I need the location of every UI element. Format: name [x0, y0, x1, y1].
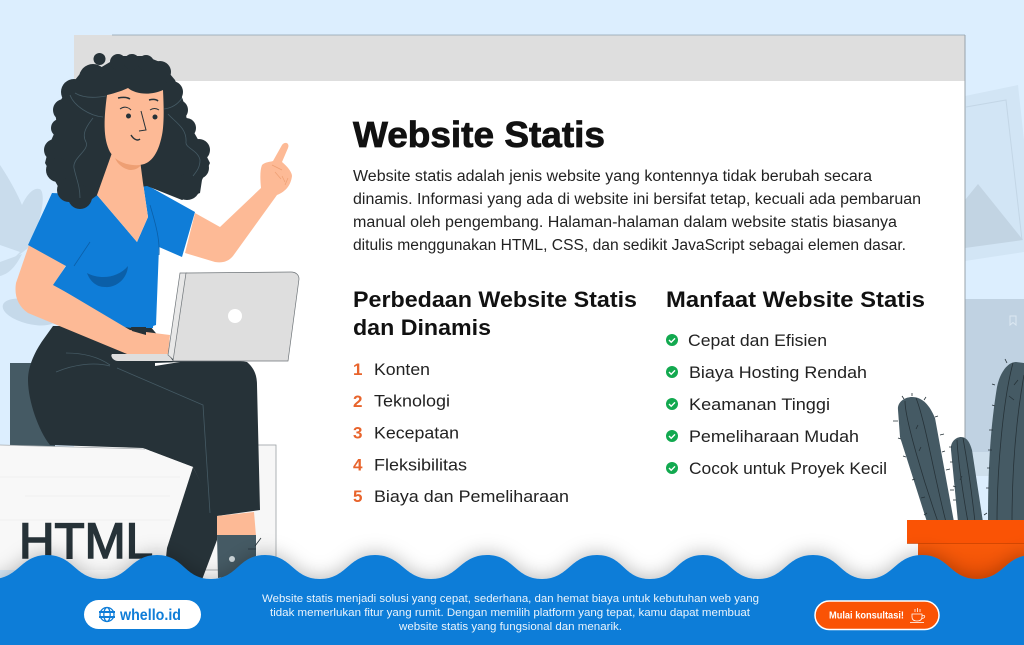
benefits checklist: Pemeliharaan Mudah	[689, 428, 859, 446]
intro paragraph: manual oleh pengembang. Halaman-halaman dalam website statis biasanya	[353, 214, 897, 231]
intro paragraph: ditulis menggunakan HTML, CSS, dan sedikit JavaScript sebagai elemen dasar.	[353, 237, 906, 254]
waist	[131, 327, 146, 335]
dark box behind woman	[10, 363, 55, 448]
hair strands	[70, 93, 200, 198]
heading: differences: Perbedaan Website Statis	[353, 287, 637, 312]
intro paragraph: Website statis adalah jenis website yang kontennya tidak berubah secara	[353, 168, 872, 185]
woman upper leg	[28, 326, 260, 516]
background image placeholder	[965, 85, 1024, 261]
footer text	[262, 593, 759, 633]
hand details	[272, 165, 288, 185]
background lower right panel	[965, 299, 1024, 476]
numbered list: 3	[353, 424, 362, 442]
cactus	[893, 359, 1024, 522]
woman lower leg	[163, 467, 217, 585]
background plant	[0, 165, 60, 330]
numbered list: 2	[353, 392, 362, 411]
icon: globe	[99, 608, 115, 622]
numbered list: Fleksibilitas	[374, 456, 467, 474]
back document	[150, 445, 276, 570]
title: Website Statis	[353, 114, 605, 155]
heading: differences: dan Dinamis	[353, 315, 491, 340]
numbered list: 5	[353, 487, 362, 506]
benefits checklist: Biaya Hosting Rendah	[689, 364, 867, 382]
flower pot	[907, 520, 1024, 610]
numbered list: Konten	[374, 361, 430, 379]
numbered list: Kecepatan	[374, 424, 459, 442]
numbered list: 4	[353, 456, 363, 474]
neck	[97, 150, 148, 242]
shirt	[28, 183, 195, 328]
chin shadow	[115, 158, 141, 170]
hair	[44, 53, 210, 209]
heading: benefits: Manfaat Website Statis	[666, 287, 925, 312]
consultation button	[815, 601, 939, 630]
shoe	[217, 535, 261, 578]
facial features	[118, 97, 159, 140]
heading: differences	[353, 287, 637, 340]
benefits checklist: Keamanan Tinggi	[689, 396, 830, 414]
benefits checklist: Cocok untuk Proyek Kecil	[689, 460, 887, 478]
woman right arm	[185, 143, 292, 262]
footer text: Website statis menjadi solusi yang cepat, sederhana, dan hemat biaya untuk kebutuhan web yang	[262, 593, 759, 605]
benefits checklist	[666, 332, 887, 478]
browser window	[74, 35, 965, 600]
icon: coffee cup	[910, 608, 925, 622]
document: HTML	[0, 445, 193, 570]
face	[105, 88, 164, 165]
footer text: tidak memerlukan fitur yang rumit. Dengan memilih platform yang tepat, kamu dapat membuat	[270, 607, 750, 619]
woman left arm	[16, 245, 170, 355]
logo pill: whello.id	[119, 607, 181, 624]
numbered list	[353, 360, 569, 506]
logo pill	[84, 600, 201, 629]
laptop	[111, 272, 299, 366]
ankle	[217, 512, 256, 536]
benefits checklist: Cepat dan Efisien	[688, 332, 827, 350]
wave footer	[0, 555, 1024, 645]
numbered list: Biaya dan Pemeliharaan	[374, 488, 569, 506]
leg crease	[56, 353, 210, 513]
numbered list: Teknologi	[374, 392, 450, 410]
document: HTML: HTML	[19, 513, 153, 569]
consultation button: Mulai konsultasi!	[829, 610, 904, 622]
shirt lower back	[45, 280, 156, 328]
intro paragraph	[353, 168, 921, 254]
intro paragraph: dinamis. Informasi yang ada di website ini bersifat tetap, kecuali ada pembaruan	[353, 191, 921, 208]
numbered list: 1	[353, 360, 362, 379]
footer text: website statis yang fungsional dan menarik.	[398, 621, 622, 633]
